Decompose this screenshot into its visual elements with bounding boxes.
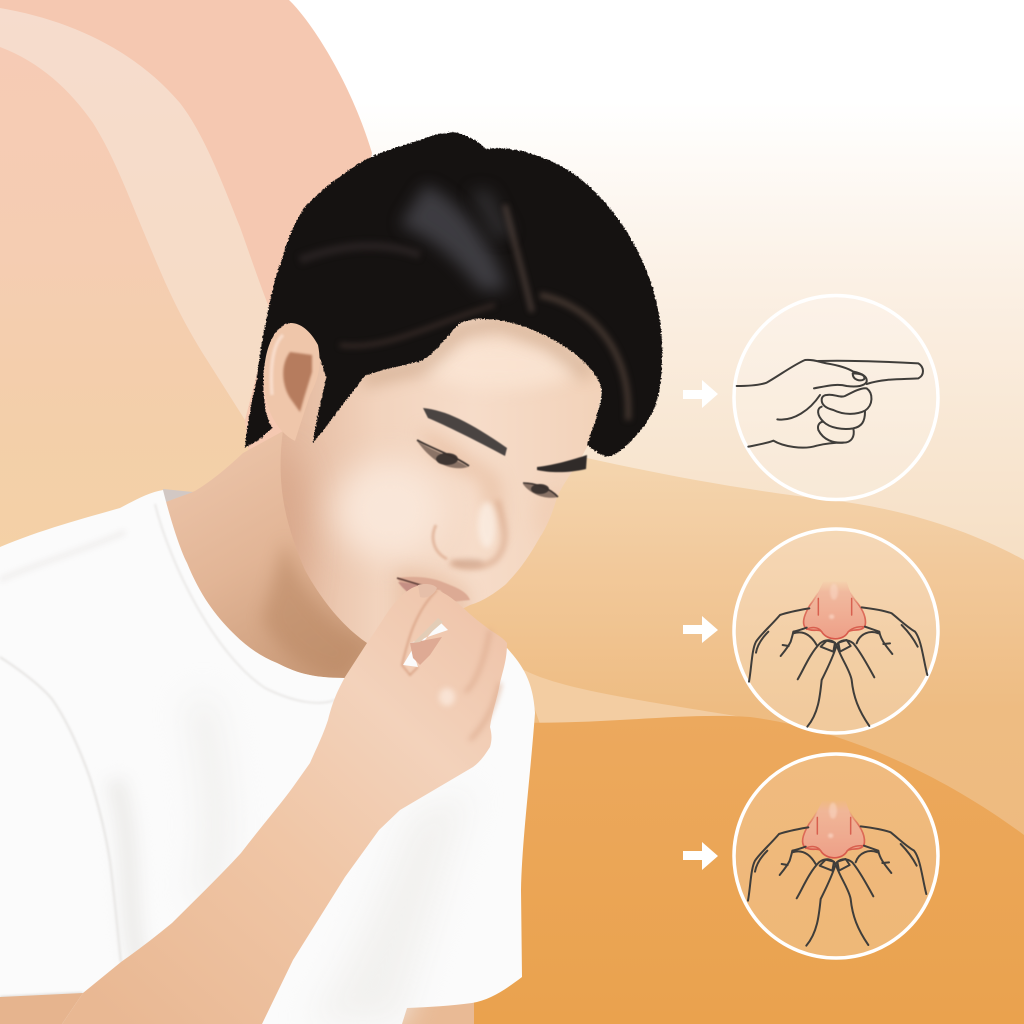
step 1: arrow [683, 380, 718, 408]
ear [264, 323, 320, 441]
background: deep orange wave [460, 716, 1024, 1024]
icon: pointing hand [737, 360, 923, 448]
right eye [523, 483, 558, 498]
forearm and raised hand [62, 584, 507, 1024]
background: mid orange wave [420, 452, 1024, 1024]
left arm below sleeve [0, 993, 83, 1024]
step 3: arrow [683, 842, 718, 870]
white t-shirt [0, 489, 535, 1024]
icon: fingers pinching nose firmly [748, 801, 926, 946]
neck [163, 430, 380, 680]
background: light ribbon wave [0, 8, 272, 420]
step 3: circle with hands on nose [734, 754, 938, 958]
step 1: circle with pointing hand [734, 296, 938, 500]
step 2: arrow [683, 616, 718, 643]
left eyebrow [423, 408, 507, 456]
right arm below sleeve [398, 995, 474, 1024]
nose [433, 500, 505, 567]
black hair [245, 132, 662, 457]
fingernail [413, 618, 443, 643]
person [0, 132, 662, 1024]
right eyebrow [537, 455, 587, 472]
face [280, 318, 602, 643]
curled fingertip [410, 637, 442, 665]
lips [397, 577, 470, 602]
background: pale strip wave [520, 668, 760, 724]
background: peach blob top-left [0, 0, 372, 560]
gap between fingers showing shirt [403, 622, 448, 667]
background: lower-left peach area [0, 47, 260, 560]
step 2: circle with hands on nose [734, 529, 938, 733]
left eye [417, 440, 469, 468]
icon: fingers pinching nose [749, 582, 927, 727]
